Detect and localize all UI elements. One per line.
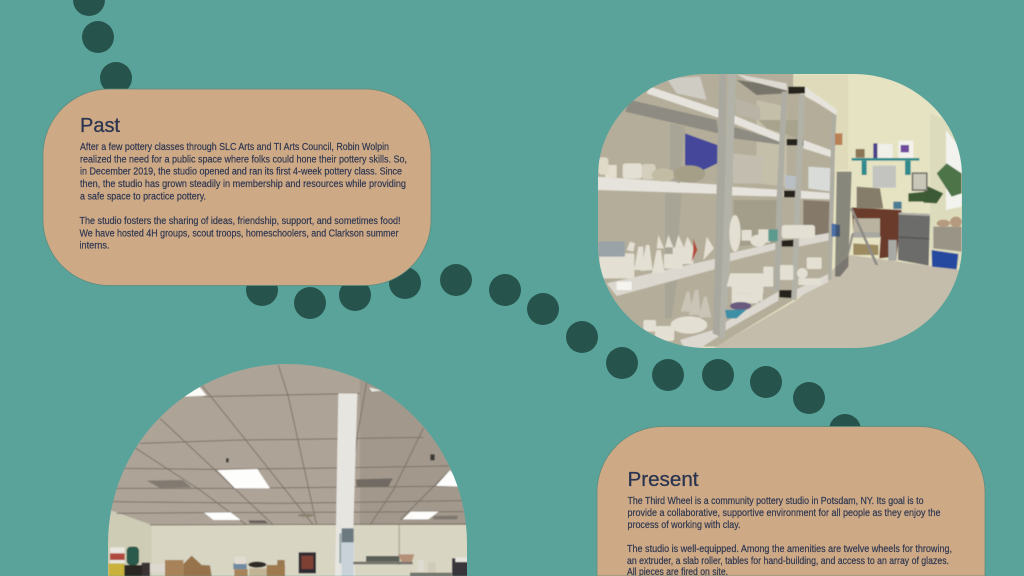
past body text: After a few pottery classes through SLC Arts and TI Arts Council, Robin Wolpin [80,142,389,153]
past body text: realized the need for a public space where folks could hone their pottery skills. So, [80,154,407,165]
present body text: The Third Wheel is a community pottery studio in Potsdam, NY. Its goal is to [628,496,924,507]
past heading: Past [80,114,120,137]
present body text: The studio is well-equipped. Among the amenities are twelve wheels for throwing, [627,544,952,555]
present heading: Present [628,468,699,491]
past card background [43,89,431,286]
present card background [597,426,985,576]
present body text: provide a collaborative, supportive environment for all people as they enjoy the [628,508,941,519]
present body text: an extruder, a slab roller, tables for hand-building, and access to an array of glazes. [627,556,949,567]
past body text: a safe space to practice pottery. [80,191,206,202]
past body text: interns. [80,241,110,252]
panel: past [43,89,431,286]
past body text: then, the studio has grown steadily in membership and resources while providing [80,179,406,190]
photo: open studio room with ceiling and column [100,360,475,576]
dotted path [73,0,861,446]
panel: present [597,426,985,576]
present body text: process of working with clay. [628,520,740,531]
present body text [627,496,952,576]
photo: studio shelves of bisqueware [590,70,970,355]
past body text: We have hosted 4H groups, scout troops, homeschoolers, and Clarkson summer [80,228,399,239]
past body text: The studio fosters the sharing of ideas, friendship, support, and sometimes food! [80,216,400,227]
past body text [80,142,407,252]
past body text: in December 2019, the studio opened and ran its first 4-week pottery class. Since [80,167,402,178]
